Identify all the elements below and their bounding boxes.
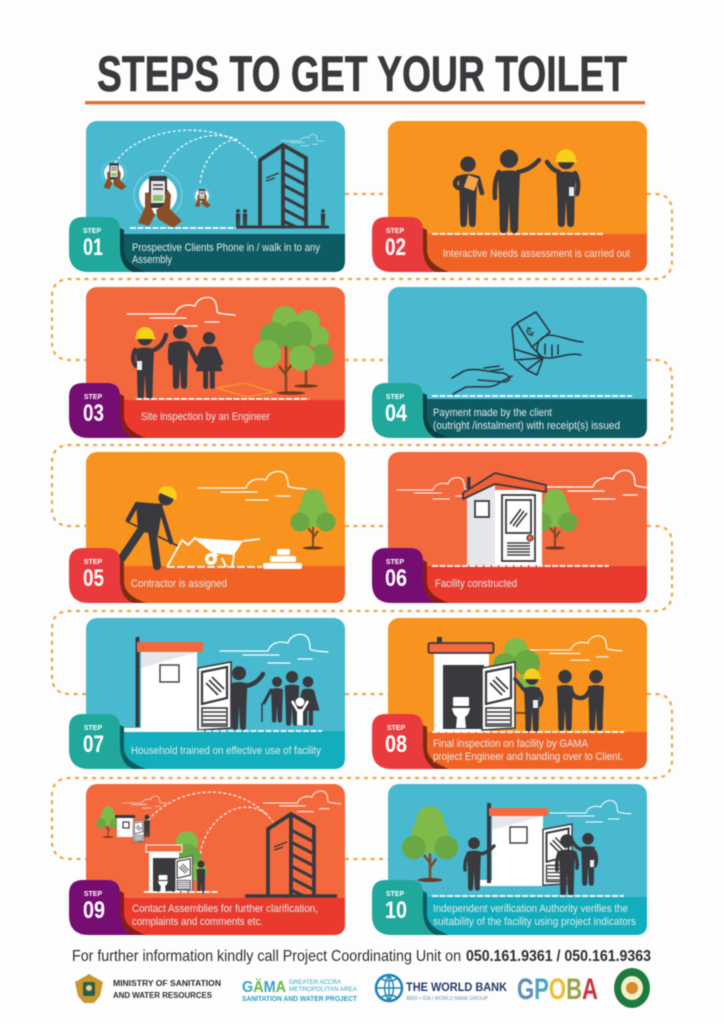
text band <box>86 400 345 438</box>
step text: complaints and comments etc. <box>132 916 263 928</box>
step badge: 01 <box>83 234 103 261</box>
panel: step 06 <box>372 452 653 603</box>
card background <box>388 784 647 935</box>
step badge: STEP <box>386 891 404 898</box>
step badge: STEP <box>84 725 102 732</box>
logo: GAMA <box>242 978 358 1003</box>
step badge: 02 <box>385 234 406 261</box>
step text: Household trained on effective use of facility <box>131 745 321 757</box>
card background <box>86 452 345 603</box>
text band <box>86 731 345 769</box>
step badge <box>372 714 449 769</box>
contact information line: For further information kindly call Project Coordinating Unit on <box>72 948 461 965</box>
card background <box>388 618 647 769</box>
step badge: STEP <box>84 559 102 566</box>
text band <box>388 566 647 603</box>
logo: World Bank: THE WORLD BANK <box>406 982 508 994</box>
logo text: ministry: AND WATER RESOURCES <box>113 991 213 1000</box>
panel: step 03 <box>69 287 345 438</box>
text band <box>86 234 345 272</box>
logo: GAMA: GREATER ACCRA <box>289 980 341 986</box>
illustration: cash handed over <box>452 312 583 394</box>
card background <box>86 121 345 272</box>
panel: step 10 <box>372 784 647 935</box>
illustration: contractor digging <box>122 471 336 569</box>
arrow: dotted connector path through all steps <box>52 194 672 859</box>
illustration: constructed facility <box>397 470 653 566</box>
illustration: household training <box>124 634 328 732</box>
logo text: ministry: MINISTRY OF SANITATION <box>113 979 221 988</box>
step badge: STEP <box>386 559 404 566</box>
step text: Contact Assemblies for further clarification, <box>132 903 318 915</box>
text band <box>388 399 647 438</box>
panel: step 09 <box>69 784 345 935</box>
illustration: independent verification <box>402 801 631 896</box>
step text: Assembly <box>132 254 172 266</box>
step badge: 08 <box>385 731 407 758</box>
panel: step 05 <box>69 452 345 603</box>
step badge: STEP <box>386 394 404 401</box>
step badge <box>69 714 146 769</box>
step badge: 09 <box>83 897 105 924</box>
step badge <box>69 880 146 935</box>
step text: Interactive Needs assessment is carried out <box>443 248 630 260</box>
logo: GAMA: SANITATION AND WATER PROJECT <box>242 996 358 1003</box>
illustration: cash handed over: ¢ <box>522 323 538 342</box>
logo: GPOBA: GPOBA <box>517 973 598 1006</box>
step badge <box>69 217 146 272</box>
panel: step 02 <box>372 121 647 272</box>
illustration: engineer and couple on site <box>127 297 333 399</box>
panel: step 01 <box>69 121 345 272</box>
step badge: 10 <box>385 897 407 924</box>
step text <box>433 407 620 432</box>
logo: seal <box>614 968 650 1008</box>
step badge: 06 <box>385 565 407 592</box>
panel: step 07 <box>69 618 345 769</box>
illustration: contacting assemblies <box>96 791 341 896</box>
step badge <box>69 383 146 438</box>
card background <box>388 287 647 438</box>
step text: suitability of the facility using project indicators <box>433 916 636 928</box>
text band <box>388 732 647 769</box>
step text: (outright /instalment) with receipt(s) issued <box>433 420 620 432</box>
text band <box>86 566 345 603</box>
step text: Payment made by the client <box>433 407 552 419</box>
text band <box>86 898 345 935</box>
text band <box>388 234 647 272</box>
illustration: final inspection and handover <box>428 636 624 732</box>
step badge: STEP <box>84 394 102 401</box>
step badge: 07 <box>83 731 104 758</box>
step badge: STEP <box>83 228 101 235</box>
panel: step 08 <box>372 618 647 769</box>
step badge: 03 <box>83 400 104 427</box>
step text: Final inspection on facility by GAMA <box>433 738 589 750</box>
card background <box>86 784 345 935</box>
card background <box>388 452 647 603</box>
step text <box>433 738 623 763</box>
step text: Facility constructed <box>435 578 517 590</box>
logo: GAMA: METROPOLITAN AREA <box>289 987 357 993</box>
logo: World Bank: IBRD • IDA | WORLD BANK GROUP <box>406 996 489 1002</box>
illustration: three people talking <box>432 149 603 234</box>
step text <box>433 903 636 928</box>
logo: ministry coat of arms <box>75 974 103 1003</box>
step badge: STEP <box>386 228 404 235</box>
contact information line: 050.161.9361 / 050.161.9363 <box>466 948 651 965</box>
step badge: STEP <box>387 725 405 732</box>
card background <box>388 121 647 272</box>
card background <box>86 287 345 438</box>
step badge <box>372 217 449 272</box>
step badge <box>372 548 449 603</box>
logo text: ministry <box>113 979 221 1000</box>
step badge: STEP <box>84 891 102 898</box>
step text: Site inspection by an Engineer <box>141 411 270 423</box>
step text: Prospective Clients Phone in / walk in to any <box>132 242 320 254</box>
title underline <box>85 101 645 104</box>
ground line <box>432 395 632 397</box>
text band <box>388 897 647 935</box>
step text <box>132 242 320 266</box>
step badge <box>372 880 449 935</box>
step text: project Engineer and handing over to Client. <box>433 751 623 763</box>
step text: Contractor is assigned <box>131 578 227 590</box>
step badge: 05 <box>83 565 104 592</box>
step badge: 04 <box>385 400 408 427</box>
illustration: calling assembly <box>102 130 329 228</box>
step text: Independent verification Authority verifies the <box>433 903 628 915</box>
panel: step 04 <box>372 287 647 438</box>
step badge <box>372 383 449 438</box>
logo: World Bank <box>376 975 508 1002</box>
card background <box>86 618 345 769</box>
step text <box>132 903 318 928</box>
step badge <box>69 548 146 603</box>
logo: GAMA: GÄMA <box>242 978 286 996</box>
